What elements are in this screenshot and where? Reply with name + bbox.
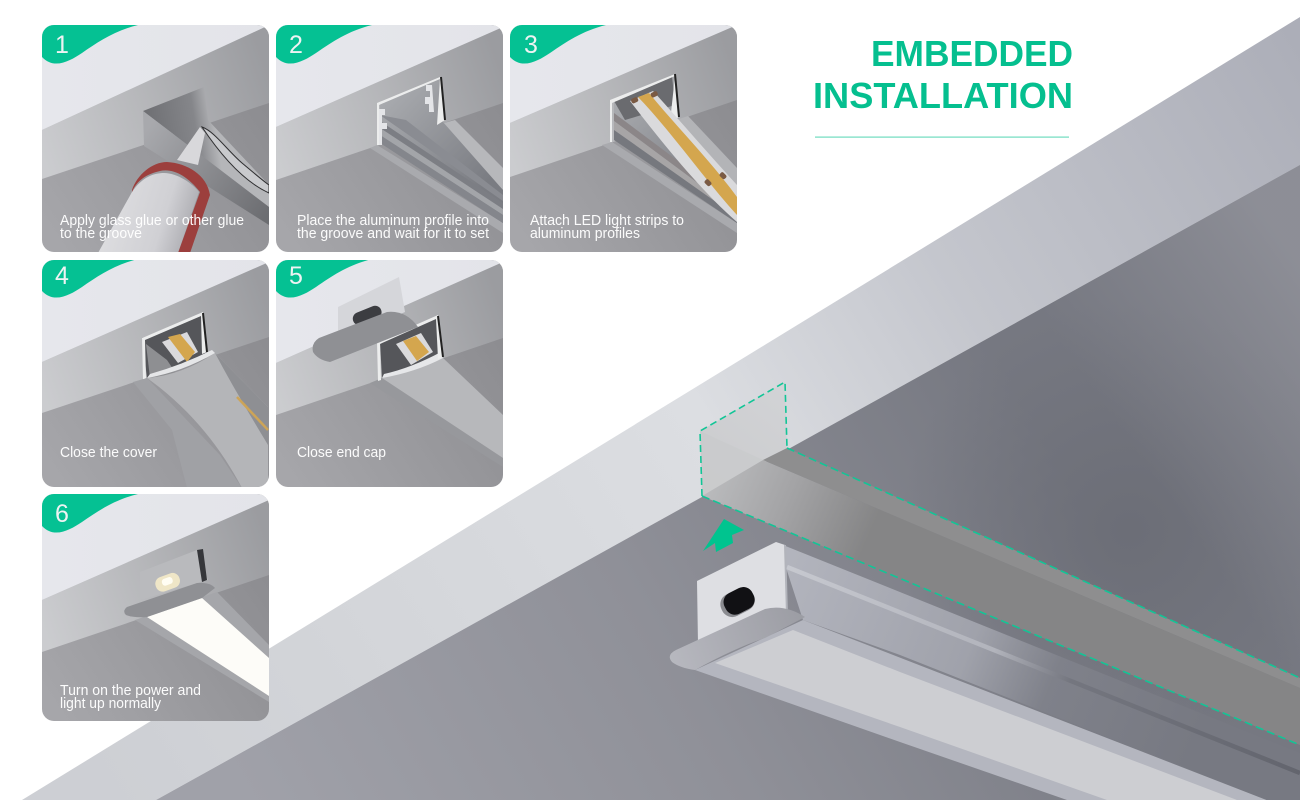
step number badge: 6 [55, 500, 69, 528]
panel: step 4 [42, 259, 269, 488]
aluminum profile [602, 74, 737, 233]
aluminum profile [370, 315, 503, 467]
icon: glue gun [98, 127, 210, 253]
step number badge [42, 25, 138, 64]
panel: step 6 [42, 494, 269, 722]
step number badge: 3 [524, 31, 538, 59]
lit diffuser [147, 598, 269, 696]
step caption: Place the aluminum profile into [297, 213, 489, 229]
step caption [297, 213, 489, 242]
panel: step 2 [276, 25, 503, 252]
step number badge [42, 494, 138, 533]
dashed groove outline: where the profile is embedded [700, 382, 1300, 745]
step number badge [276, 259, 372, 298]
arrow: install upward [703, 519, 744, 552]
step number badge: 1 [55, 31, 69, 59]
panel: step 3 [510, 25, 737, 252]
step number badge [510, 25, 606, 64]
profile rod highlight [787, 567, 1300, 773]
profile diffuser cover [715, 630, 1237, 800]
panel: step 5 [276, 259, 503, 487]
title underline [815, 136, 1069, 138]
step caption: Close end cap [297, 445, 386, 461]
panel: step 1 [42, 25, 269, 253]
title: EMBEDDED [871, 33, 1073, 74]
LED light strip [630, 91, 737, 222]
end cap [124, 549, 215, 617]
step number badge: 4 [55, 262, 69, 290]
aluminum profile [370, 77, 503, 233]
step number badge: 2 [289, 31, 303, 59]
groove [143, 87, 269, 225]
end cap flange [670, 608, 805, 670]
step number badge: 5 [289, 262, 303, 290]
step caption: aluminum profiles [530, 226, 640, 242]
step number badge [42, 259, 138, 298]
aluminum profile rim [135, 592, 269, 702]
step caption: light up normally [60, 696, 162, 712]
step caption: Apply glass glue or other glue [60, 213, 244, 229]
step caption: Turn on the power and [60, 683, 201, 699]
step caption [60, 683, 201, 712]
step caption: Close the cover [60, 445, 157, 461]
step caption: Attach LED light strips to [530, 213, 684, 229]
end cap hole [717, 584, 759, 621]
title [813, 33, 1073, 116]
step caption: to the groove [60, 226, 142, 242]
step caption [60, 213, 244, 242]
profile lower strip [695, 620, 1300, 800]
end cap block [697, 542, 787, 645]
step number badge [276, 25, 372, 64]
cover [133, 350, 268, 488]
aluminum profile with end cap [670, 542, 1300, 800]
step caption [530, 213, 684, 242]
title: INSTALLATION [813, 75, 1073, 116]
profile inner wall [778, 543, 1300, 800]
step caption: the groove and wait for it to set [297, 226, 489, 242]
aluminum profile opening [142, 312, 207, 380]
end cap [313, 277, 418, 362]
background ceiling surface [156, 165, 1300, 800]
